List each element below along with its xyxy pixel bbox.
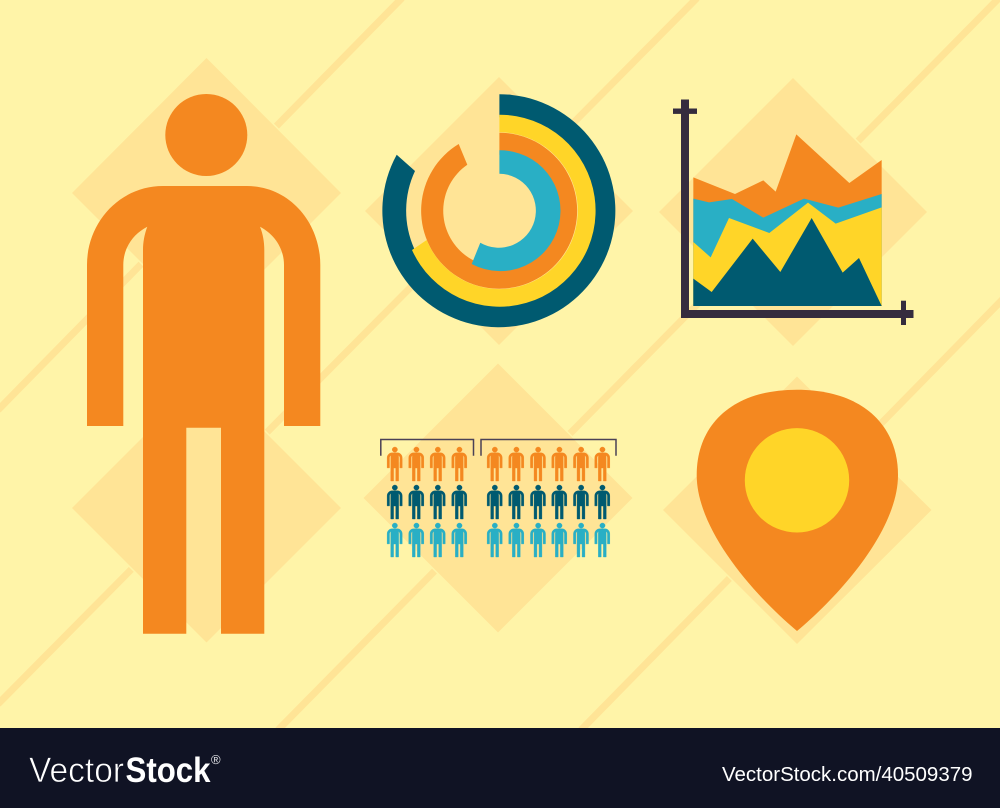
footer logo bold part: Stock [126, 751, 211, 790]
area: orange [693, 134, 882, 306]
area: blue [693, 194, 882, 306]
icon: large standing person [87, 94, 320, 634]
ring: inner blue [472, 150, 561, 271]
group brackets [381, 440, 616, 456]
footer bar [0, 728, 1000, 808]
row: orange people [387, 447, 610, 481]
icon: map pin [697, 390, 898, 631]
radial bar chart [382, 94, 615, 327]
ring: yellow [412, 115, 596, 307]
footer image id: VectorStock.com/40509379 [722, 764, 972, 786]
row: teal people [387, 485, 610, 519]
chart axes [673, 100, 914, 325]
area: yellow [693, 203, 882, 306]
row: blue people [387, 523, 610, 557]
ring: orange [421, 133, 577, 289]
footer registered mark: ® [211, 752, 221, 767]
area: teal [693, 218, 882, 306]
footer logo: Vector [29, 751, 124, 790]
ring: outer teal [382, 94, 615, 327]
people pictogram chart [381, 440, 616, 557]
stacked area chart [673, 100, 914, 325]
diamond backdrops [72, 58, 932, 644]
